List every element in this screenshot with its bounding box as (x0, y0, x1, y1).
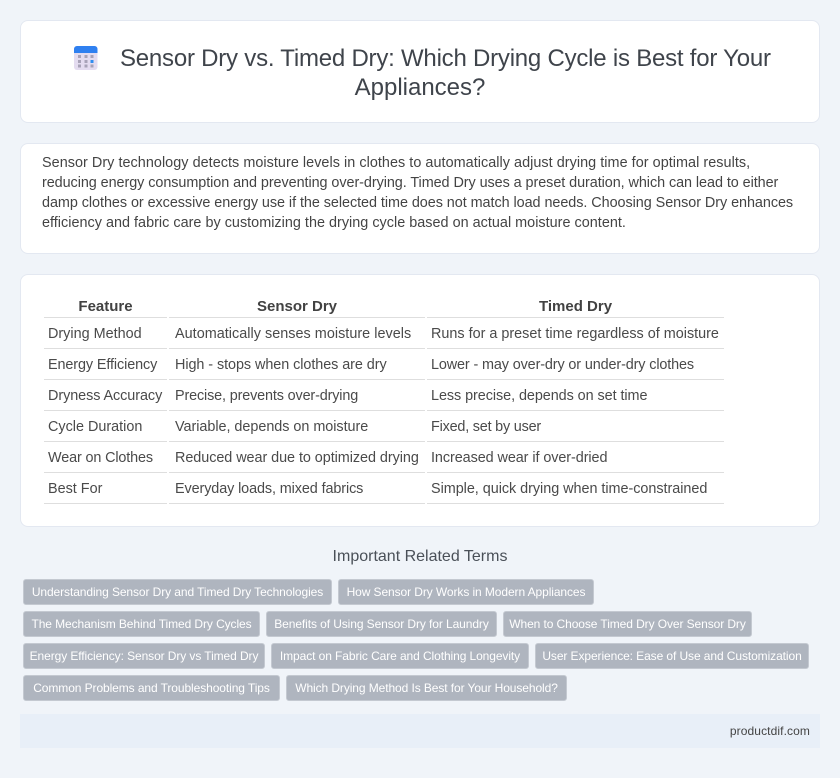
comparison table: Cycle Duration (48, 419, 142, 435)
related term tags: The Mechanism Behind Timed Dry Cycles (31, 617, 252, 631)
comparison table: Drying Method (48, 326, 142, 342)
related term tags: Benefits of Using Sensor Dry for Laundry (274, 617, 489, 631)
comparison table: Feature (78, 298, 133, 315)
comparison table: Best For (48, 481, 102, 497)
footer bar (20, 714, 820, 748)
title (120, 45, 771, 101)
comparison table: Sensor Dry (257, 298, 337, 315)
comparison table: Lower - may over-dry or under-dry clothes (431, 357, 694, 373)
related term tags: Impact on Fabric Care and Clothing Longevity (280, 649, 520, 663)
footer credit: productdif.com (730, 724, 810, 738)
comparison table: Less precise, depends on set time (431, 388, 647, 404)
related term tags: How Sensor Dry Works in Modern Appliances (347, 585, 585, 599)
comparison table: Timed Dry (539, 298, 612, 315)
intro paragraph (42, 155, 793, 231)
title: Appliances? (355, 74, 485, 101)
comparison table: Dryness Accuracy (48, 388, 162, 404)
comparison table: Automatically senses moisture levels (175, 326, 411, 342)
comparison table: Simple, quick drying when time-constrained (431, 481, 707, 497)
related term tags: Common Problems and Troubleshooting Tips (33, 681, 270, 695)
intro paragraph: reducing energy consumption and preventing over-drying. Timed Dry uses a preset duration, which can lead to either (42, 175, 778, 191)
intro paragraph: Sensor Dry technology detects moisture levels in clothes to automatically adjust drying time for optimal results, (42, 155, 750, 171)
comparison table: Everyday loads, mixed fabrics (175, 481, 363, 497)
panel: header (20, 20, 820, 123)
comparison table: High - stops when clothes are dry (175, 357, 387, 373)
panel: comparison table (20, 274, 820, 527)
related term tags: When to Choose Timed Dry Over Sensor Dry (509, 617, 746, 631)
related term tags: User Experience: Ease of Use and Customization (542, 649, 802, 663)
related term tags (23, 579, 809, 701)
related term tags: Understanding Sensor Dry and Timed Dry Technologies (32, 585, 323, 599)
comparison table: Precise, prevents over-drying (175, 388, 358, 404)
comparison table: Variable, depends on moisture (175, 419, 368, 435)
comparison table: Increased wear if over-dried (431, 450, 607, 466)
panel: intro text (20, 143, 820, 254)
related term tags: Which Drying Method Is Best for Your Household? (295, 681, 558, 695)
title: Sensor Dry vs. Timed Dry: Which Drying Cycle is Best for Your (120, 45, 771, 72)
comparison table: Fixed, set by user (431, 419, 541, 435)
related term tags: Energy Efficiency: Sensor Dry vs Timed Dry (30, 649, 258, 663)
icon: calendar (74, 46, 98, 70)
heading: related terms: Important Related Terms (333, 548, 507, 565)
intro paragraph: efficiency and fabric care by customizing the drying cycle based on actual moisture content. (42, 215, 626, 231)
comparison table: Runs for a preset time regardless of moisture (431, 326, 719, 342)
comparison table: Reduced wear due to optimized drying (175, 450, 419, 466)
intro paragraph: damp clothes or excessive energy use if the selected time does not match load needs. Choosing Sensor Dry enhances (42, 195, 793, 211)
comparison table (44, 298, 724, 504)
comparison table: Wear on Clothes (48, 450, 153, 466)
comparison table: Energy Efficiency (48, 357, 157, 373)
